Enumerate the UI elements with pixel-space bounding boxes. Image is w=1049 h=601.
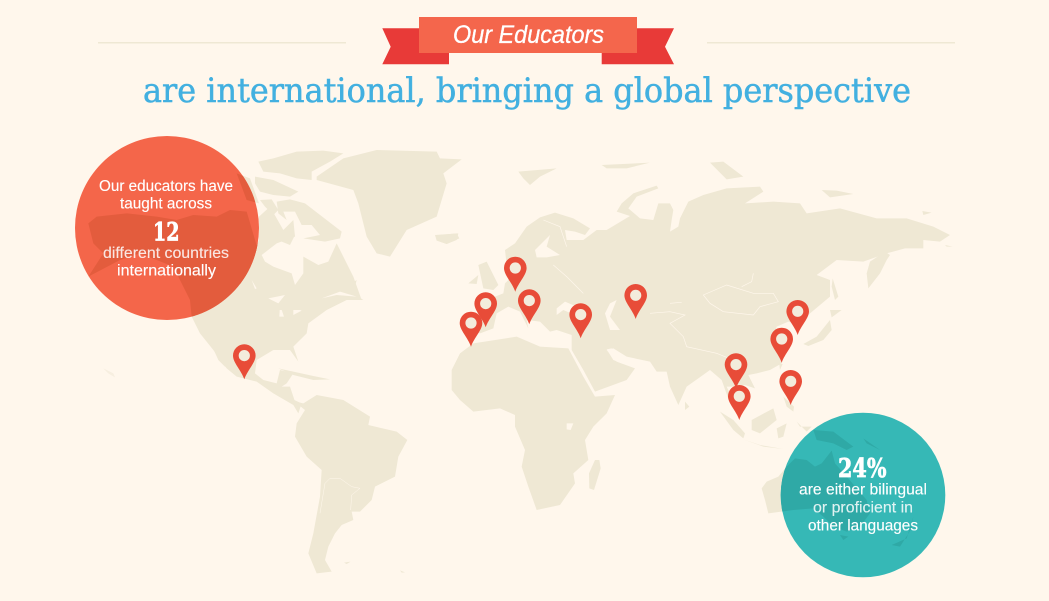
pin: morocco: [460, 312, 482, 347]
pin: china: [770, 328, 793, 363]
banner heading: Our Educators: [453, 21, 604, 49]
callout text: languages: are either bilingual: [799, 482, 927, 498]
pin: korea: [786, 300, 809, 335]
callout text: countries: different countries: [103, 245, 229, 262]
pin: spain: [474, 292, 497, 327]
callout circle: countries: [75, 136, 259, 320]
stat: 24%: 24%: [838, 454, 887, 484]
ribbon tail right: [602, 28, 674, 64]
water: lakes: [270, 295, 287, 300]
callout text: countries: taught across: [120, 196, 212, 212]
borders: asia: [543, 220, 778, 360]
pin: mexico: [233, 344, 256, 379]
ribbon banner: [382, 17, 674, 64]
map seen through teal circle: [780, 430, 913, 546]
pin: malaysia: [728, 385, 751, 420]
title: are international, bringing a global perspective: [143, 71, 911, 111]
pin: philippines: [779, 370, 802, 405]
land: north america: [88, 173, 363, 413]
stat: 12: 12: [153, 218, 180, 246]
header rule left: [98, 42, 346, 44]
land: south america: [280, 387, 407, 573]
ribbon tail left: [382, 28, 449, 64]
pin: kazakhstan: [624, 284, 647, 319]
callout text: countries: internationally: [117, 262, 216, 280]
land: greenland and iceland: [317, 150, 462, 257]
pin: italy: [518, 289, 541, 324]
callout text: countries: Our educators have: [99, 178, 233, 195]
callout text: countries: [99, 178, 233, 280]
callout text: languages: [799, 454, 927, 534]
callout text: languages: other languages: [808, 518, 918, 534]
land: australia and oceania: [743, 422, 913, 547]
location pins: [233, 257, 809, 420]
map seen through red circle: [88, 174, 258, 317]
pin: germany: [504, 257, 527, 292]
water: northern lakes: [252, 280, 257, 289]
callout circle: languages: [780, 412, 946, 578]
land: canadian arctic: [240, 151, 362, 310]
ribbon centre: [419, 17, 637, 53]
header rule right: [707, 42, 955, 44]
pin: thailand: [725, 353, 747, 388]
water: inland seas: [535, 235, 635, 430]
world map: [88, 150, 953, 573]
pin: turkey: [569, 303, 592, 338]
borders: south america: [320, 478, 360, 513]
callout text: languages: or proficient in: [813, 500, 913, 516]
land: africa, eurasia and islands: [440, 162, 953, 510]
